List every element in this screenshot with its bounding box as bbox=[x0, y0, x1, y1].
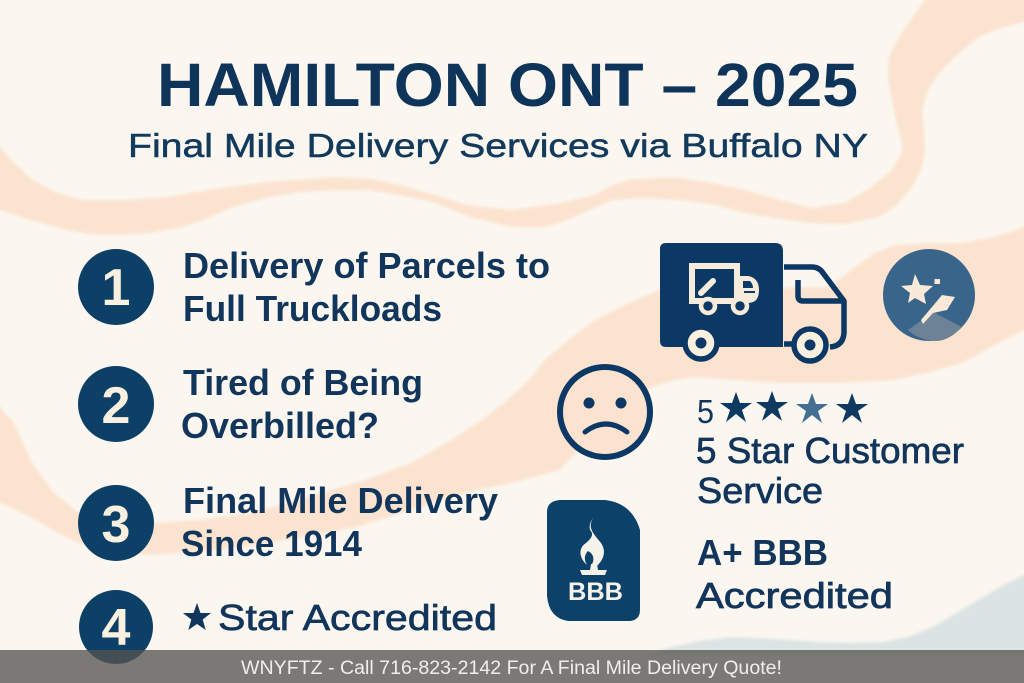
icon: delivery truck bbox=[660, 243, 844, 361]
number badge 1 bbox=[78, 249, 154, 325]
item 4 text: Star Accredited bbox=[218, 597, 497, 638]
number badge 4: 4 bbox=[102, 599, 131, 657]
number badge 2: 2 bbox=[102, 377, 130, 435]
item 1 text: Full Truckloads bbox=[183, 288, 442, 329]
icon: small truck inside bbox=[692, 266, 759, 313]
list item 4 bbox=[79, 590, 497, 664]
five star rating bbox=[697, 391, 868, 430]
subtitle: Final Mile Delivery Services via Buffalo NY bbox=[128, 127, 868, 164]
number badge 3 bbox=[78, 485, 154, 561]
list item 1 bbox=[78, 245, 550, 329]
accreditation text bbox=[696, 532, 893, 616]
footer bar: WNYFTZ - Call 716-823-2142 For A Final Mile Delivery Quote! bbox=[241, 658, 782, 679]
item 2 text: Overbilled? bbox=[181, 405, 379, 446]
item 1 text: Delivery of Parcels to bbox=[183, 245, 550, 286]
title: HAMILTON ONT – 2025 bbox=[157, 51, 858, 119]
icon: BBB logo: BBB bbox=[568, 578, 623, 606]
accreditation text: A+ BBB bbox=[697, 532, 828, 573]
item 2 text: Tired of Being bbox=[183, 362, 423, 403]
item 3 text: Final Mile Delivery bbox=[183, 480, 498, 521]
item 2 text bbox=[181, 362, 423, 446]
number badge 2 bbox=[78, 366, 154, 442]
customer service text: Service bbox=[697, 470, 823, 511]
item 1 text bbox=[183, 245, 550, 329]
item 3 text: Since 1914 bbox=[181, 523, 362, 564]
five star rating: 5 bbox=[697, 393, 714, 430]
number badge 1: 1 bbox=[102, 259, 130, 317]
number badge 3: 3 bbox=[102, 496, 130, 554]
accreditation text: Accredited bbox=[696, 575, 893, 616]
footer bar bbox=[0, 650, 1024, 683]
icon: BBB logo bbox=[547, 500, 640, 621]
customer service text: 5 Star Customer bbox=[696, 430, 964, 471]
icon: star badge bbox=[883, 249, 975, 341]
icon: sad face bbox=[560, 367, 650, 457]
list item 3 bbox=[78, 480, 498, 564]
item 3 text bbox=[181, 480, 498, 564]
star icon bbox=[183, 603, 211, 630]
customer service text bbox=[696, 430, 964, 511]
list item 2 bbox=[78, 362, 423, 446]
number badge 4 bbox=[79, 590, 153, 664]
